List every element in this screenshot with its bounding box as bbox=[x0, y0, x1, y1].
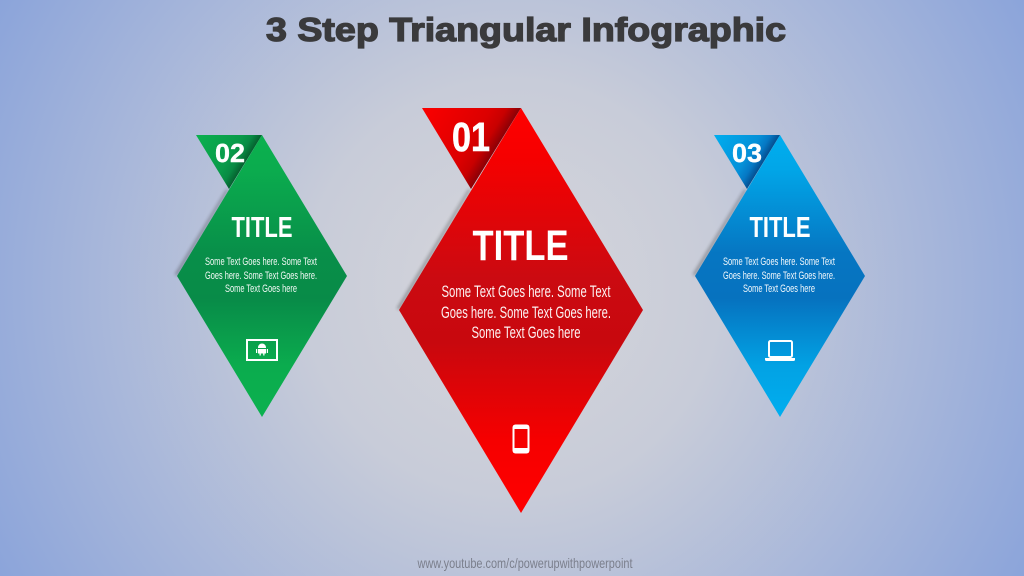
shadow: step 02 diamond bbox=[175, 189, 229, 276]
diamond: step 03 bbox=[695, 135, 865, 417]
diamond: step 02 bbox=[177, 135, 347, 417]
shadow: step 01 diamond bbox=[397, 189, 471, 310]
text block: step 02 bbox=[205, 256, 317, 295]
text block: step 02: Some Text Goes here. Some Text bbox=[205, 256, 317, 268]
tab: step 03 bbox=[714, 135, 780, 189]
tab: step 02 bbox=[196, 135, 262, 189]
icon: android tablet bbox=[247, 340, 277, 360]
panel: step 02 bbox=[175, 135, 347, 417]
diamond: step 01 bbox=[399, 108, 643, 513]
text block: step 03: Some Text Goes here bbox=[743, 283, 815, 295]
panel: step 03 bbox=[693, 135, 865, 417]
heading: step 02 title: TITLE bbox=[232, 212, 292, 244]
number: 01: 01 bbox=[452, 114, 490, 160]
heading: step 01 title: TITLE bbox=[472, 222, 568, 270]
number: 03: 03 bbox=[732, 138, 762, 168]
text block: step 02: Goes here. Some Text Goes here. bbox=[205, 270, 317, 282]
number: 02: 02 bbox=[215, 138, 245, 168]
text block: step 03 bbox=[723, 256, 835, 295]
icon: laptop bbox=[765, 341, 795, 361]
text block: step 03: Some Text Goes here. Some Text bbox=[723, 256, 835, 268]
heading: step 03 title: TITLE bbox=[750, 212, 810, 244]
shadow: step 03 diamond bbox=[693, 189, 747, 276]
text block: step 01: Goes here. Some Text Goes here. bbox=[441, 304, 611, 322]
title: 3 Step Triangular Infographic bbox=[266, 11, 786, 48]
panel: step 01 bbox=[397, 108, 643, 513]
icon: smartphone bbox=[513, 425, 529, 453]
footer url: www.youtube.com/c/powerupwithpowerpoint bbox=[417, 555, 633, 571]
text block: step 01: Some Text Goes here. Some Text bbox=[442, 283, 611, 301]
text block: step 02: Some Text Goes here bbox=[225, 283, 297, 295]
text block: step 01 bbox=[441, 283, 611, 342]
tab: step 01 bbox=[422, 108, 521, 189]
text block: step 03: Goes here. Some Text Goes here. bbox=[723, 270, 835, 282]
text block: step 01: Some Text Goes here bbox=[472, 324, 580, 342]
